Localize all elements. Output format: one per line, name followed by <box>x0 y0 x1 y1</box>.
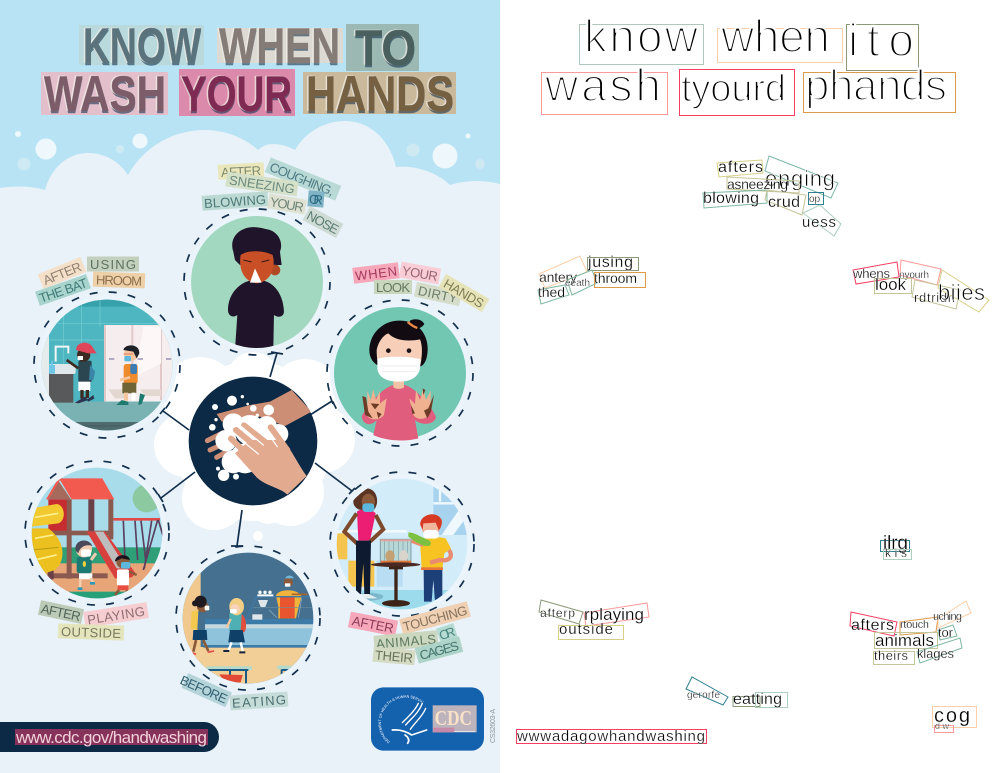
word box: look: look <box>875 275 906 294</box>
figure: boy in orange vest walking <box>116 345 145 405</box>
word box: rdtridn: rdtridn <box>914 290 955 305</box>
label: after coughing, sneezing, or blowing your nose <box>202 157 344 238</box>
word box: throom: throom <box>594 270 637 286</box>
word: AFTER: AFTER <box>41 259 84 288</box>
word box: theirs: theirs <box>874 648 908 663</box>
label: before eating <box>178 672 288 711</box>
word: BLOWING: BLOWING <box>204 192 266 211</box>
title word: KNOW: KNOW <box>83 18 202 74</box>
word box: crud <box>765 190 806 215</box>
word box: blowing: blowing <box>703 190 759 207</box>
word box: enging <box>765 156 838 198</box>
icon: playground with children <box>32 468 162 598</box>
word box: uess <box>802 205 841 236</box>
word box: know: know <box>584 10 699 62</box>
word box: asneezing: asneezing <box>727 176 788 192</box>
publication code: CS32603-A <box>490 709 497 743</box>
word box: tyourd: tyourd <box>681 68 786 110</box>
icon: sneezing boy <box>228 227 284 350</box>
panel: infographic poster <box>0 0 500 773</box>
figure: cafeteria worker <box>276 576 307 618</box>
word box: rtouch <box>900 617 938 635</box>
label: after using the bathroom <box>35 256 145 306</box>
word box: whens: whens <box>852 266 890 281</box>
icon: right muddy hand <box>409 388 434 419</box>
word box: afterp <box>539 600 583 624</box>
word box: afterp: afterp <box>540 606 575 620</box>
icon: left muddy hand <box>362 389 387 419</box>
word: CAGES: CAGES <box>418 638 461 663</box>
word box: uching <box>933 601 971 628</box>
word box: eatting: eatting <box>733 691 782 708</box>
icon: girl with muddy hands <box>362 319 436 441</box>
title word: YOUR: YOUR <box>181 66 292 122</box>
background soap cloud <box>0 121 500 773</box>
word box: afters: afters <box>718 159 763 176</box>
word box: op <box>808 192 824 205</box>
word: THEIR: THEIR <box>374 647 414 666</box>
figure: woman in pink top <box>344 488 383 598</box>
word box: website url: wwwadagowhandwashing <box>516 728 705 745</box>
scene: coughing / sneezing <box>184 209 330 355</box>
word box: when: when <box>720 10 830 62</box>
icon: HHS eagle <box>392 703 427 743</box>
word box: op: op <box>809 194 821 205</box>
word box: wash: wash <box>544 59 661 111</box>
word: AFTER: AFTER <box>221 163 261 180</box>
word: YOUR: YOUR <box>269 194 305 215</box>
title word: TO: TO <box>355 20 416 76</box>
scene: using the bathroom <box>34 292 180 442</box>
figure: boy washing at sink <box>67 343 97 403</box>
word: YOUR: YOUR <box>401 263 439 284</box>
word box: cog: cog <box>934 705 970 727</box>
scene: before eating <box>176 546 320 690</box>
icon: yellow tube slide <box>32 504 64 573</box>
label: after touching animals or their cages <box>348 601 471 666</box>
figure: girl with curly hair <box>191 596 214 654</box>
icon: cafeteria tables <box>206 666 292 684</box>
scene: dirty hands <box>327 300 473 446</box>
word box: uess: uess <box>802 214 836 231</box>
word: EATING: EATING <box>232 692 286 711</box>
word: OR: OR <box>437 624 457 643</box>
figure: boy holding iguana <box>408 514 451 602</box>
word box: enging: enging <box>765 166 835 191</box>
word box: kis: kis <box>885 546 907 560</box>
word box: biies: biies <box>938 280 985 305</box>
word box: antery <box>539 256 587 288</box>
HHS seal lettering: DEPARTMENT OF HEALTH & HUMAN SERVICES USA <box>378 695 424 744</box>
word box: eeath: eeath <box>565 278 590 289</box>
word: ANIMALS: ANIMALS <box>376 631 437 652</box>
label: when your hands look dirty <box>352 262 489 312</box>
word box: tor: tor <box>938 625 954 640</box>
icon: children in school bathroom <box>42 300 172 430</box>
word box: outside: outside <box>559 621 613 638</box>
scene: playing outside <box>25 461 169 605</box>
title word: WHEN: WHEN <box>219 18 340 74</box>
word: COUGHING: COUGHING, <box>268 159 336 199</box>
panel: detected text boxes <box>500 0 1000 773</box>
word box: crud: crud <box>768 194 800 211</box>
word: PLAYING: PLAYING <box>86 604 146 627</box>
word box: klages: klages <box>917 646 954 661</box>
word: SNEEZING: SNEEZING <box>228 172 296 197</box>
word: LOOK: LOOK <box>376 280 410 295</box>
icon: children in cafeteria line <box>180 553 320 687</box>
word box: uching: uching <box>933 611 962 623</box>
word box: rplaying: rplaying <box>584 605 644 624</box>
word box: nyourh: nyourh <box>899 270 929 281</box>
word box: whens <box>852 262 899 284</box>
word: AFTER: AFTER <box>40 601 82 624</box>
word: TOUCHING: TOUCHING <box>401 603 469 634</box>
title word: WASH: WASH <box>44 66 166 122</box>
word: OR: OR <box>308 191 324 208</box>
word: DIRTY: DIRTY <box>417 283 459 306</box>
word box: ito: ito <box>848 14 914 66</box>
word box: thed: thed <box>538 284 565 300</box>
figure: child in white shirt <box>115 555 137 598</box>
word: HROOM: HROOM <box>96 272 142 289</box>
word: NOSE: NOSE <box>304 208 342 237</box>
word box: phands: phands <box>805 61 947 110</box>
website url bar: www.cdc.gov/handwashing <box>15 728 207 747</box>
word box: jusing: jusing <box>587 254 633 271</box>
icon: hands washing with soap <box>189 377 317 505</box>
label: after playing outside <box>38 600 149 641</box>
figure: boy in teal shirt <box>75 541 96 590</box>
website url bar <box>0 722 219 752</box>
word box: gerorfe: gerorfe <box>687 690 720 701</box>
word box: animals: animals <box>875 631 934 650</box>
word box: thed <box>538 284 569 304</box>
word: USING: USING <box>90 257 136 272</box>
word box: gerorfe <box>686 677 728 705</box>
scene: touching animals <box>330 472 474 616</box>
word box: dw <box>934 721 954 732</box>
word box: afters: afters <box>851 617 894 634</box>
word box: rdtridn <box>912 280 960 309</box>
icon: table with pet cage <box>371 539 420 607</box>
word box: eeath <box>565 270 597 295</box>
CDC badge: CDC <box>435 708 472 730</box>
word box: ilrg: ilrg <box>883 533 908 554</box>
word box: rtouch: rtouch <box>900 619 929 631</box>
figure: blonde girl <box>223 598 246 652</box>
word box: dw: dw <box>935 721 950 731</box>
icon: woman and boy with iguana <box>337 479 470 610</box>
connector lines to scenes <box>158 352 355 546</box>
word: THE BAT: THE BAT <box>37 275 89 306</box>
word box: nyourh <box>899 260 941 285</box>
logos: HHS and CDC <box>371 687 484 751</box>
word box: biies <box>938 270 989 312</box>
word box: afters <box>850 612 897 636</box>
word: OUTSIDE: OUTSIDE <box>61 624 122 641</box>
word: WHEN: WHEN <box>354 263 398 283</box>
title word: HANDS: HANDS <box>306 66 454 122</box>
word: HANDS: HANDS <box>441 276 487 311</box>
word: AFTER: AFTER <box>351 613 395 636</box>
title <box>41 18 456 122</box>
decorative bubbles <box>15 131 485 170</box>
word box: klages <box>917 638 962 663</box>
word box: antery: antery <box>539 269 577 285</box>
icon: food display case <box>246 591 313 620</box>
word: BEFORE: BEFORE <box>178 672 230 707</box>
central white soap cloud <box>154 352 355 541</box>
